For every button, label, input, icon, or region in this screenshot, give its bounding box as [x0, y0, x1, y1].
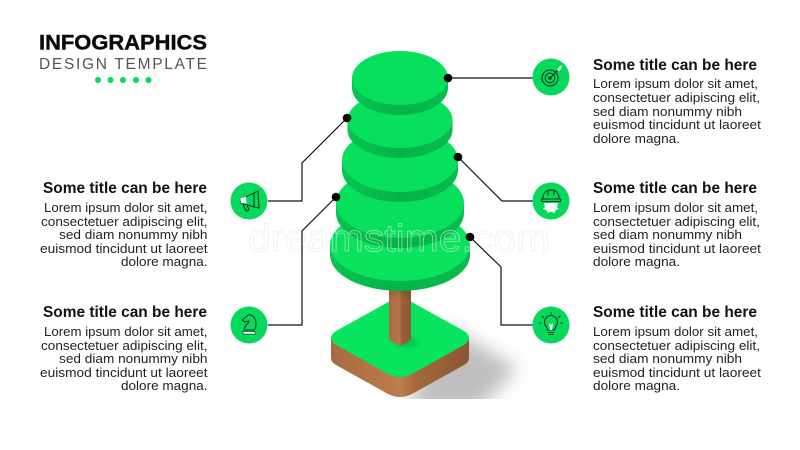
watermark: dreamstime.com: [248, 218, 550, 260]
panel body: sed diam nonummy nibh: [59, 227, 208, 242]
foliage disc 5: [330, 209, 470, 291]
trunk shadow on grass: [393, 337, 419, 347]
panel: upper left text: [40, 180, 208, 269]
panel body: euismod tincidunt ut laoreet: [40, 365, 208, 380]
subheading: design template: DESIGN TEMPLATE: [39, 56, 207, 73]
panel body: consectetuer adipiscing elit,: [593, 214, 760, 229]
panel body: dolore magna.: [121, 254, 208, 269]
foliage disc 3: [342, 128, 458, 202]
panel title: Some title can be here: [43, 304, 207, 321]
panel: bottom right text: [593, 304, 761, 393]
foliage disc 1: [352, 51, 448, 115]
panel body: dolore magna.: [593, 131, 680, 146]
grass top: [331, 298, 469, 377]
panel body: euismod tincidunt ut laoreet: [40, 241, 208, 256]
connector: top right: [444, 74, 534, 82]
panel body: euismod tincidunt ut laoreet: [593, 117, 761, 132]
foliage disc 2: [348, 92, 453, 158]
connector: right lower: [466, 233, 534, 325]
title block: [39, 32, 207, 83]
panel body: [40, 324, 208, 393]
panel title: Some title can be here: [593, 57, 757, 74]
panel body: Lorem ipsum dolor sit amet,: [44, 200, 208, 215]
icon: chess knight: [230, 306, 268, 344]
panel body: [593, 324, 761, 393]
panel body: euismod tincidunt ut laoreet: [593, 241, 761, 256]
panel body: sed diam nonummy nibh: [593, 227, 742, 242]
panel title: Some title can be here: [43, 180, 207, 197]
infographic: [40, 34, 761, 399]
connector: left lower: [268, 193, 340, 325]
decorative green dots: [95, 77, 152, 83]
panel body: consectetuer adipiscing elit,: [593, 338, 760, 353]
heading: infographics: INFOGRAPHICS: [39, 32, 207, 54]
panel body: sed diam nonummy nibh: [59, 351, 208, 366]
icon: helmet and gear: [532, 182, 570, 220]
icon: megaphone: [230, 182, 268, 220]
panel: lower left text: [40, 304, 208, 393]
panel body: Lorem ipsum dolor sit amet,: [593, 200, 758, 215]
panel body: dolore magna.: [121, 378, 208, 393]
panel title: Some title can be here: [593, 180, 757, 197]
ground shadow: [405, 325, 518, 410]
panel body: consectetuer adipiscing elit,: [41, 338, 208, 353]
panel body: Lorem ipsum dolor sit amet,: [593, 76, 758, 91]
panel body: [593, 76, 761, 146]
icon: target with arrow: [532, 58, 570, 96]
panel body: sed diam nonummy nibh: [593, 351, 742, 366]
icon: light bulb: [532, 306, 570, 344]
connector: right middle: [454, 153, 534, 201]
foliage disc 4: [336, 168, 464, 248]
panel body: sed diam nonummy nibh: [593, 104, 742, 119]
panel body: consectetuer adipiscing elit,: [593, 90, 760, 105]
panel body: [593, 200, 761, 269]
panel body: Lorem ipsum dolor sit amet,: [44, 324, 208, 339]
panel body: consectetuer adipiscing elit,: [41, 214, 208, 229]
panel body: dolore magna.: [593, 378, 680, 393]
panel body: Lorem ipsum dolor sit amet,: [593, 324, 758, 339]
panel: top right text: [593, 57, 761, 146]
panel body: euismod tincidunt ut laoreet: [593, 365, 761, 380]
connector: left upper: [268, 114, 351, 201]
trunk: [389, 285, 411, 346]
panel body: [40, 200, 208, 269]
panel title: Some title can be here: [593, 304, 757, 321]
tree illustration: [330, 51, 518, 410]
soil base: [331, 338, 469, 397]
panel: middle right text: [593, 180, 761, 269]
panel body: dolore magna.: [593, 254, 680, 269]
